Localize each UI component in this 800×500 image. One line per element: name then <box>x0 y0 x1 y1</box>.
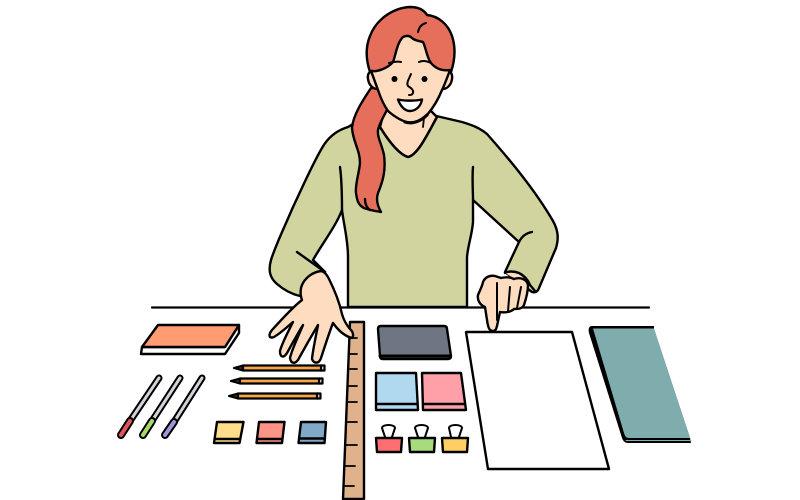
pink note pad <box>422 373 466 410</box>
mouth <box>398 100 422 111</box>
right hand pointing finger <box>478 276 528 331</box>
blue block <box>298 422 326 443</box>
figure: woman <box>270 7 558 363</box>
finger lines <box>497 283 521 320</box>
dark pad <box>378 326 451 359</box>
right eye <box>422 76 428 82</box>
right ear <box>440 71 452 89</box>
neckline of sweater <box>380 117 437 157</box>
neck line <box>423 118 424 127</box>
yellow block <box>214 422 244 443</box>
red clip <box>376 425 402 452</box>
hair: top <box>367 7 455 76</box>
orange notebook <box>141 325 239 354</box>
sweater <box>270 108 558 307</box>
nose <box>407 74 413 95</box>
neck <box>380 108 437 157</box>
hair: back and ponytail <box>352 88 388 212</box>
yellow clip <box>442 425 468 452</box>
teal book <box>589 326 691 443</box>
binder clips <box>376 425 468 452</box>
green clip <box>409 425 435 452</box>
pencil 2 <box>231 378 322 384</box>
pencil 3 <box>229 394 320 398</box>
green pen <box>143 378 180 435</box>
purple pen <box>165 378 202 435</box>
ruler <box>343 322 364 499</box>
red pen <box>121 378 159 435</box>
left ear <box>368 71 380 89</box>
face <box>371 36 450 123</box>
eyebrows <box>389 61 431 63</box>
jaw shadow <box>405 115 427 123</box>
sticky blocks <box>214 422 326 443</box>
white paper sheet <box>466 332 609 469</box>
right cuff of hand <box>505 272 535 291</box>
left hand <box>270 271 353 363</box>
table edge <box>152 306 649 309</box>
left eye <box>392 76 398 82</box>
pencil 1 <box>234 366 324 370</box>
hair parting <box>418 23 426 32</box>
blue note pad <box>376 373 418 410</box>
hair strand lines <box>365 199 370 210</box>
pens <box>121 378 202 435</box>
pencils <box>229 366 324 398</box>
red block <box>256 422 284 443</box>
